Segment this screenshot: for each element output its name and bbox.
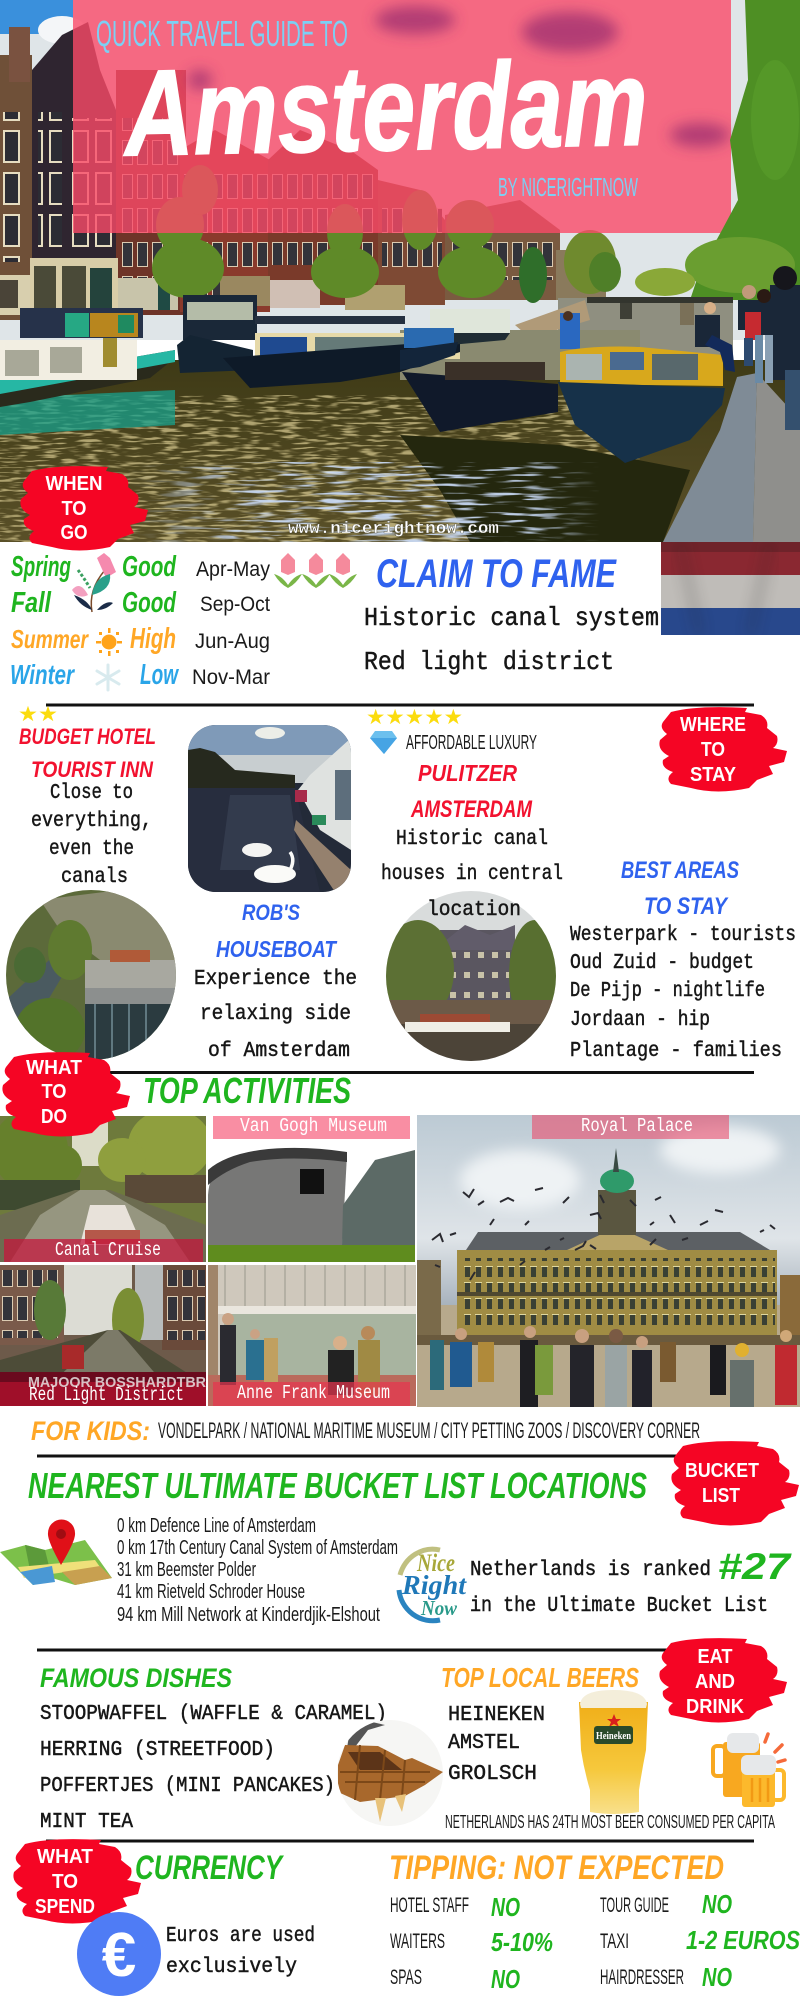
section badge: eat and drink: DRINK — [686, 1696, 744, 1718]
dish list — [40, 1703, 387, 1834]
ranking text: Netherlands is ranked — [470, 1559, 711, 1582]
section badge: eat and drink — [659, 1638, 787, 1722]
season row: fall: Fall — [11, 587, 52, 619]
for kids row — [31, 1416, 700, 1446]
dish list: MINT TEA — [40, 1811, 133, 1834]
section badge: what to do: WHAT — [26, 1057, 82, 1079]
season row: winter — [10, 659, 270, 691]
icon: map with pin — [0, 1520, 112, 1585]
section badge: where to stay — [659, 707, 787, 792]
title: quick travel guide to: QUICK TRAVEL GUIDE TO — [96, 13, 348, 54]
icon: flower — [72, 553, 116, 612]
season row: spring: Spring — [11, 551, 71, 583]
panel: currency — [77, 1849, 315, 1996]
season row: fall — [11, 587, 270, 619]
photo: glass of heineken — [579, 1690, 648, 1814]
hero photo: Amsterdam canal — [0, 0, 800, 545]
bucket list distances: 31 km Beemster Polder — [117, 1559, 256, 1581]
bucket list distances — [117, 1515, 398, 1626]
season row: fall: Good — [122, 587, 177, 619]
dish list: POFFERTJES (MINI PANCAKES) — [40, 1775, 335, 1798]
section badge: where to stay: WHERE — [680, 714, 746, 736]
dish list: STOOPWAFFEL (WAFFLE & CARAMEL) — [40, 1703, 387, 1726]
beer list: AMSTEL — [448, 1732, 520, 1755]
heading: CURRENCY — [135, 1849, 285, 1887]
description: even the — [49, 838, 134, 861]
tipping row: spas: NO — [491, 1964, 520, 1994]
fame item: red light district: Red light district — [364, 647, 614, 677]
icon: diamond — [370, 731, 397, 754]
tipping row: taxi: TAXI — [600, 1930, 629, 1953]
photo: canal cruise — [0, 1109, 212, 1262]
logo: nice right now: Right — [401, 1570, 468, 1600]
section badge: eat and drink: AND — [695, 1671, 735, 1693]
tipping row: hotel staff: HOTEL STAFF — [390, 1894, 469, 1917]
heading: BEST AREAS — [621, 857, 739, 884]
currency note: exclusively — [166, 1956, 297, 1979]
hotel name line 2: TOURIST INN — [31, 757, 154, 782]
photo: van gogh museum — [208, 1116, 415, 1262]
season row: summer: Summer — [11, 624, 89, 654]
section badge: when to go: GO — [60, 522, 88, 544]
beer list: HEINEKEN — [448, 1704, 545, 1727]
label: red light district: Red Light District — [29, 1384, 184, 1406]
icon: tulips — [274, 553, 357, 588]
icon: snowflake — [97, 665, 119, 690]
description: of Amsterdam — [208, 1040, 350, 1063]
season row: summer — [11, 623, 270, 655]
panel: best areas to stay — [570, 857, 796, 1063]
section badge: where to stay: TO — [701, 739, 725, 761]
season row: spring: Apr-May — [196, 558, 270, 581]
section badge: what to spend: TO — [52, 1871, 78, 1893]
currency note: Euros are used — [166, 1925, 315, 1948]
heading: FAMOUS DISHES — [40, 1663, 232, 1693]
section badge: what to spend: WHAT — [37, 1846, 93, 1868]
price tag: AFFORDABLE LUXURY — [406, 732, 537, 754]
section badge: what to do: TO — [42, 1081, 66, 1103]
photo: glass of heineken: Heineken — [596, 1730, 631, 1742]
bucket list distances: 0 km 17th Century Canal System of Amsterdam — [117, 1537, 398, 1559]
description — [194, 968, 357, 1063]
photo: aerial circle of hotel — [0, 890, 180, 1065]
name line 2: HOUSEBOAT — [216, 936, 338, 962]
section badge: eat and drink: EAT — [698, 1646, 732, 1668]
description: location — [427, 899, 521, 922]
tipping row: tour guide: NO — [702, 1889, 732, 1919]
section badge: what to spend — [13, 1839, 141, 1924]
description: Experience the — [194, 968, 357, 991]
beer list: GROLSCH — [448, 1763, 537, 1786]
heading: TIPPING: NOT EXPECTED — [389, 1849, 724, 1887]
description — [31, 782, 152, 889]
season row: summer: High — [130, 623, 176, 655]
panel: tipping — [389, 1849, 800, 1994]
label: royal palace: Royal Palace — [581, 1115, 693, 1137]
bucket list distances: 0 km Defence Line of Amsterdam — [117, 1515, 316, 1537]
tipping row: hotel staff: NO — [491, 1892, 520, 1922]
section badge: what to spend: SPEND — [35, 1896, 95, 1918]
section badge: what to do: DO — [41, 1106, 67, 1128]
photo: red light district — [0, 1265, 206, 1406]
heading line 2: TO STAY — [644, 893, 729, 920]
byline: BY NICERIGHTNOW — [498, 172, 638, 202]
photo: circle of hotel exterior — [382, 890, 561, 1064]
name line 2: AMSTERDAM — [410, 796, 533, 823]
ranking callout — [470, 1546, 793, 1618]
panel: claim to fame — [364, 552, 659, 677]
tipping row: taxi — [600, 1925, 800, 1955]
street sign text: MAJOOR BOSSHARDTBR — [28, 1374, 206, 1391]
flag of the Netherlands — [661, 542, 800, 635]
season row: fall: Sep-Oct — [200, 593, 270, 616]
title: Amsterdam: Amsterdam — [121, 35, 649, 181]
five star rating: ★★★★★ — [366, 705, 463, 729]
currency note — [166, 1925, 315, 1979]
description: houses in central — [381, 863, 563, 886]
tipping row: waiters: 5-10% — [491, 1927, 553, 1957]
icon: sun — [96, 628, 122, 656]
season row: winter: Low — [140, 659, 180, 691]
icon: euro coin — [77, 1912, 161, 1996]
icon: beer mugs — [713, 1733, 785, 1807]
icon: euro coin: € — [102, 1921, 136, 1990]
area list: Oud Zuid - budget — [570, 952, 754, 975]
tipping row: spas: SPAS — [390, 1966, 422, 1989]
logo: nice right now: Now — [420, 1596, 458, 1620]
heading: TOP LOCAL BEERS — [441, 1662, 639, 1693]
label: van gogh museum: Van Gogh Museum — [240, 1115, 387, 1137]
description — [381, 828, 563, 922]
section badge: where to stay: STAY — [690, 764, 737, 786]
bucket list distances: 41 km Rietveld Schroder House — [117, 1581, 305, 1603]
section badge: when to go: TO — [62, 498, 86, 520]
watermark url: www.nicerightnow.com — [288, 520, 499, 539]
season row: summer: Jun-Aug — [195, 630, 270, 653]
photo: royal palace — [417, 1115, 800, 1415]
panel: top local beers — [441, 1662, 775, 1832]
panel: famous dishes — [40, 1663, 387, 1834]
label: anne frank museum: Anne Frank Museum — [237, 1382, 390, 1404]
description: Close to — [50, 782, 133, 805]
heading: CLAIM TO FAME — [376, 552, 617, 596]
rank number: #27 — [718, 1546, 793, 1587]
area list: Jordaan - hip — [570, 1009, 710, 1032]
tipping row: spas — [390, 1964, 520, 1994]
for kids label: FOR KIDS: — [31, 1416, 150, 1446]
photo: stroopwafel — [337, 1720, 443, 1826]
section badge: when to go: WHEN — [46, 473, 102, 495]
name: ROB'S — [242, 900, 300, 925]
tipping row: waiters: WAITERS — [390, 1930, 445, 1953]
section badge: bucket list — [671, 1441, 799, 1526]
panel: rob's houseboat — [194, 900, 357, 1063]
heading: top activities: TOP ACTIVITIES — [143, 1070, 351, 1111]
two star rating: ★★ — [18, 702, 58, 726]
season row: winter: Winter — [10, 659, 76, 690]
description: relaxing side — [200, 1003, 351, 1026]
area list — [570, 924, 796, 1063]
season row: winter: Nov-Mar — [192, 666, 270, 689]
tipping row: hairdresser: HAIRDRESSER — [600, 1966, 684, 1989]
trees — [152, 165, 621, 303]
description: canals — [61, 866, 128, 889]
section badge: when to go — [20, 466, 148, 550]
tipping row: waiters — [390, 1927, 553, 1957]
label: canal cruise: Canal Cruise — [55, 1239, 161, 1261]
logo: nice right now — [399, 1549, 468, 1621]
section badge: what to do — [2, 1052, 130, 1136]
photo: houseboat on canal — [188, 725, 351, 892]
season row: spring — [11, 551, 270, 583]
beer list — [448, 1704, 545, 1786]
panel: seasons — [10, 551, 357, 691]
tipping row: tour guide: TOUR GUIDE — [600, 1894, 669, 1917]
description: everything, — [31, 810, 152, 833]
description: Historic canal — [396, 828, 548, 851]
section badge: bucket list: BUCKET — [685, 1460, 759, 1482]
dish list: HERRING (STREETFOOD) — [40, 1739, 275, 1762]
tipping row: hairdresser — [600, 1962, 732, 1992]
fame item: canal system: Historic canal system — [364, 603, 659, 633]
hotel name: BUDGET HOTEL — [19, 724, 156, 749]
photo: anne frank museum — [208, 1265, 416, 1406]
logo: nice right now: Nice — [416, 1550, 455, 1577]
tipping row: hairdresser: NO — [702, 1962, 732, 1992]
bucket list distances: 94 km Mill Network at Kinderdjik-Elshout — [117, 1604, 380, 1626]
season row: spring: Good — [122, 551, 177, 583]
panel: pulitzer amsterdam — [366, 705, 563, 922]
section badge: bucket list: LIST — [702, 1485, 740, 1507]
panel: budget hotel — [18, 702, 156, 889]
name: PULITZER — [418, 760, 517, 786]
